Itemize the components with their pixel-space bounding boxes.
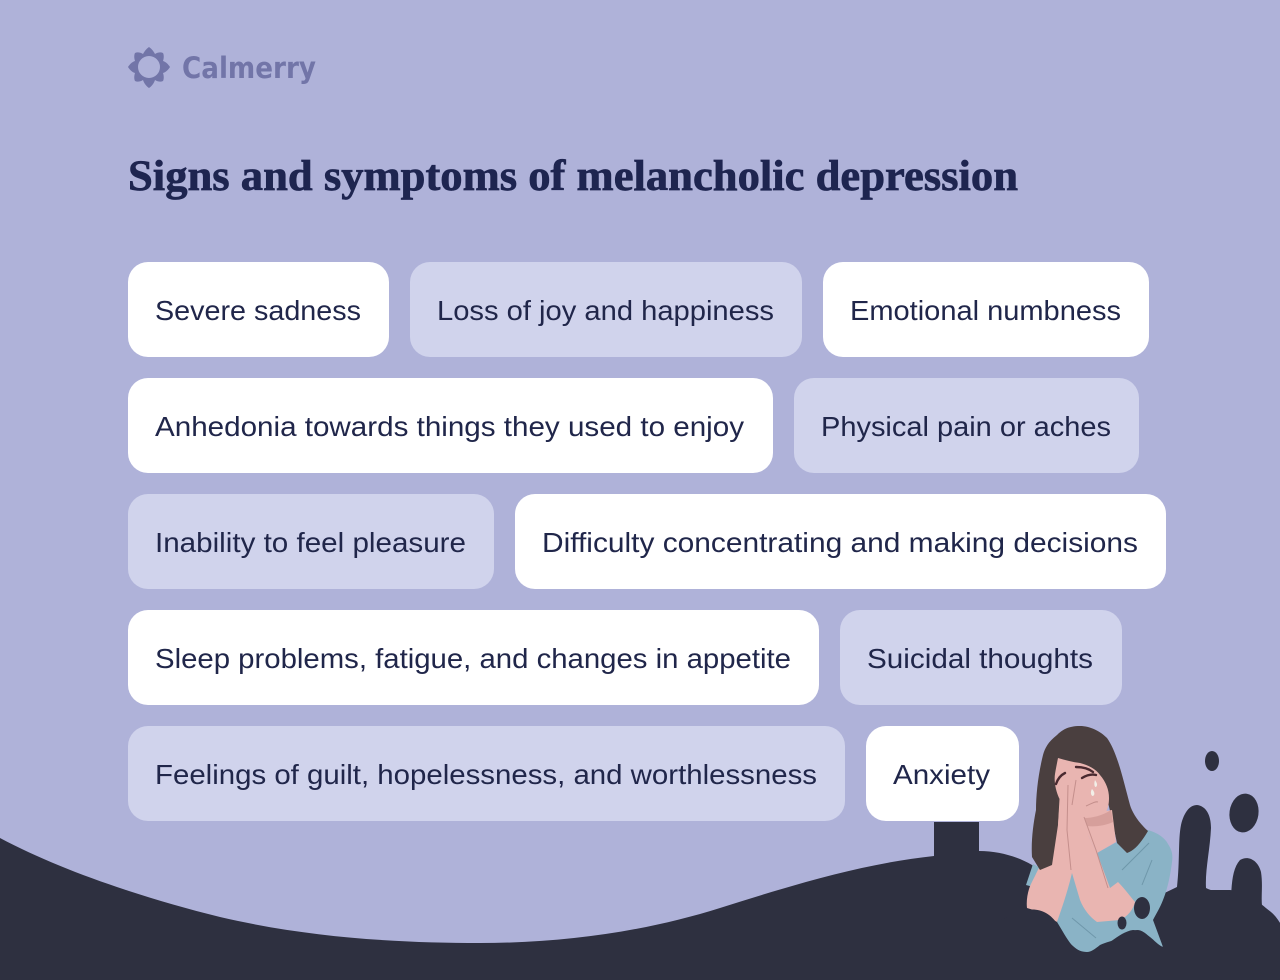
card: physical pain: Physical pain or aches bbox=[821, 411, 1111, 442]
card: difficulty concentrating bbox=[515, 494, 1166, 589]
card: anxiety: Anxiety bbox=[893, 759, 990, 790]
card: loss of joy bbox=[410, 262, 802, 357]
foreground ground and tendrils bbox=[1000, 805, 1280, 980]
card: sleep problems bbox=[128, 610, 819, 705]
mouth and finger lines bbox=[1067, 780, 1108, 888]
card: guilt and worthlessness: Feelings of guilt, hopelessness, and worthlessness bbox=[155, 759, 817, 790]
card: difficulty concentrating: Difficulty concentrating and making decisions bbox=[542, 527, 1138, 558]
card: suicidal thoughts bbox=[840, 610, 1122, 705]
background dark hill bbox=[0, 822, 1280, 980]
card: anhedonia bbox=[128, 378, 773, 473]
card: suicidal thoughts: Suicidal thoughts bbox=[867, 643, 1093, 674]
hair bbox=[1032, 726, 1148, 870]
logo wordmark: Calmerry bbox=[182, 51, 316, 85]
card: physical pain bbox=[794, 378, 1139, 473]
blob small on shirt bbox=[1118, 916, 1126, 930]
shirt creases bbox=[1072, 843, 1152, 938]
shirt bbox=[1057, 830, 1172, 952]
face bbox=[1055, 758, 1109, 818]
logo: Calmerry bbox=[128, 47, 316, 88]
blob large bbox=[1227, 792, 1261, 834]
illustration: crying woman bbox=[1026, 726, 1172, 952]
card: severe sadness bbox=[128, 262, 389, 357]
hands over face bbox=[1058, 768, 1092, 850]
foreground dark shapes bbox=[1000, 751, 1280, 980]
card: severe sadness: Severe sadness bbox=[155, 295, 361, 326]
card: sleep problems: Sleep problems, fatigue, and changes in appetite bbox=[155, 643, 791, 674]
neck and chest bbox=[1084, 810, 1116, 853]
neck shadow bbox=[1084, 810, 1113, 826]
card: anhedonia: Anhedonia towards things they used to enjoy bbox=[155, 411, 744, 442]
card: emotional numbness bbox=[823, 262, 1149, 357]
card: guilt and worthlessness bbox=[128, 726, 845, 821]
left sleeve bbox=[1026, 864, 1044, 888]
card: loss of joy: Loss of joy and happiness bbox=[437, 295, 774, 326]
card: anxiety bbox=[866, 726, 1019, 821]
symptom cards bbox=[128, 262, 1166, 821]
card: inability to feel pleasure: Inability to feel pleasure bbox=[155, 527, 466, 558]
arms and hands bbox=[1027, 795, 1135, 922]
logo icon: flower bbox=[128, 47, 170, 88]
card: emotional numbness: Emotional numbness bbox=[850, 295, 1121, 326]
blob on shirt bbox=[1134, 897, 1150, 919]
eyebrows and eyes bbox=[1056, 767, 1096, 784]
blob top bbox=[1205, 751, 1219, 771]
tear bbox=[1091, 780, 1097, 796]
title: Signs and symptoms of melancholic depression bbox=[128, 153, 1018, 200]
card: inability to feel pleasure bbox=[128, 494, 494, 589]
